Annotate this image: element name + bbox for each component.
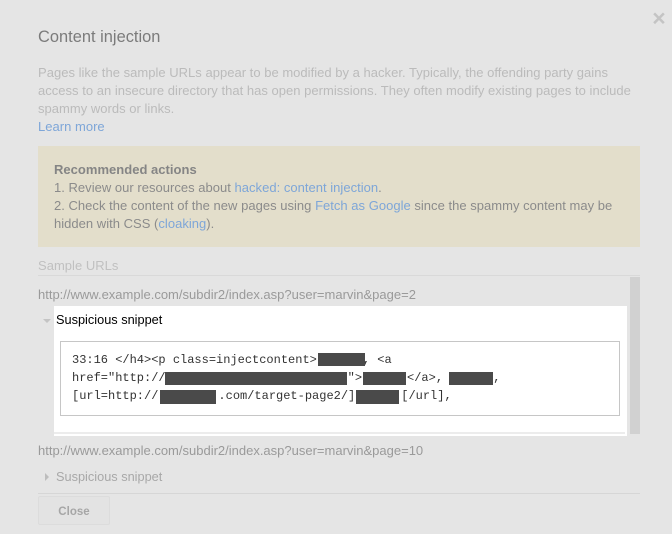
divider: [38, 493, 640, 494]
close icon: ×: [652, 5, 666, 31]
code line 3: [url=http:// .com/target-page2/] [/url],: [72, 389, 452, 403]
close button: Close: [58, 506, 90, 518]
description text: Pages like the sample URLs appear to be modified by a hacker. Typically, the offending party gains: [38, 65, 608, 80]
redaction: line 1: [318, 353, 365, 366]
snippet bottom rule: [54, 432, 625, 434]
redaction: line 2 URL: [165, 372, 347, 385]
divider: [38, 275, 640, 276]
panel: suspicious snippet expanded: [54, 306, 627, 436]
sample URL 2: http://www.example.com/subdir2/index.asp?user=marvin&page=10: [38, 443, 423, 458]
redaction: line 2 anchor: [363, 372, 406, 385]
title: Content injection: [38, 28, 160, 46]
snippet heading: Suspicious snippet: [56, 312, 162, 327]
scrollbar: [630, 277, 640, 434]
redaction: line 3 domain: [160, 390, 216, 404]
action 2: 2. Check the content of the new pages using Fetch as Google since the spammy content may be: [54, 198, 612, 213]
close button: [38, 496, 110, 525]
heading: recommended actions: Recommended actions: [54, 162, 197, 177]
collapsed snippet label: Suspicious snippet: [56, 469, 162, 484]
redaction: line 2 trailing: [449, 372, 493, 385]
heading: sample URLs: Sample URLs: [38, 258, 118, 273]
description text: Learn more: [38, 119, 105, 134]
collapsed arrow icon: [45, 473, 49, 481]
redaction: line 3 anchor: [356, 390, 399, 404]
action 2 continued: hidden with CSS (cloaking).: [54, 216, 214, 231]
code line 1: 33:16 </h4><p class=injectcontent> , <a: [72, 353, 392, 367]
panel: recommended actions: [38, 146, 640, 247]
code box: [60, 341, 620, 416]
description text: [38, 65, 631, 134]
expanded arrow icon: [43, 319, 51, 323]
description text: spammy words or links.: [38, 101, 174, 116]
sample URL 1: http://www.example.com/subdir2/index.asp?user=marvin&page=2: [38, 287, 416, 302]
code line 2: href="http:// "> </a>, ,: [72, 371, 500, 385]
description text: access to an insecure directory that has open permissions. They often modify existing pages to include: [38, 83, 631, 98]
action 1: 1. Review our resources about hacked: content injection.: [54, 180, 382, 195]
